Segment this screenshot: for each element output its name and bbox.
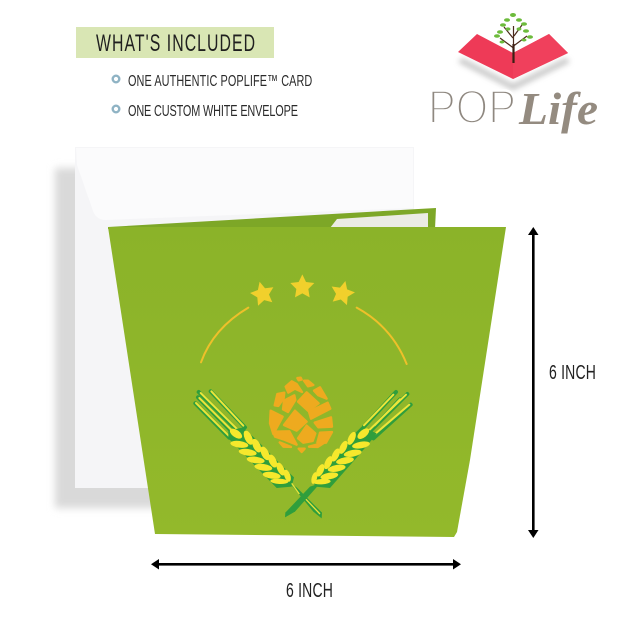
heading: what's included (76, 27, 274, 58)
card front panel (108, 227, 506, 537)
logo wordmark: POP: POP (428, 80, 516, 133)
envelope flap (76, 148, 413, 220)
right wheat ear (285, 392, 411, 517)
heading: what's included: WHAT'S INCLUDED (96, 31, 255, 57)
card artwork (195, 274, 411, 518)
left wheat ear (195, 391, 322, 518)
green card (108, 208, 506, 537)
height label: 6 INCH (549, 360, 596, 384)
left arc (201, 308, 248, 362)
hop cone (270, 378, 332, 452)
logo wordmark: Life: Life (518, 83, 598, 134)
left awns (195, 391, 245, 438)
list item: envelope: ONE CUSTOM WHITE ENVELOPE (128, 102, 298, 120)
right awns (364, 392, 411, 438)
poplife logo (428, 13, 598, 134)
logo: tree (494, 13, 533, 63)
logo: red open book (458, 34, 570, 90)
width label: 6 INCH (286, 578, 333, 602)
card back panel (108, 208, 436, 229)
white envelope with shadow (55, 147, 414, 508)
width dimension arrow (151, 559, 461, 570)
list item: poplife card: ONE AUTHENTIC POPLIFE™ CARD (128, 72, 312, 90)
right arc (357, 308, 407, 364)
included items list (113, 72, 312, 120)
card notch showing interior (330, 213, 428, 228)
envelope body (75, 147, 414, 488)
height dimension arrow (528, 227, 538, 538)
envelope shadow (55, 168, 175, 508)
three stars (248, 274, 357, 307)
